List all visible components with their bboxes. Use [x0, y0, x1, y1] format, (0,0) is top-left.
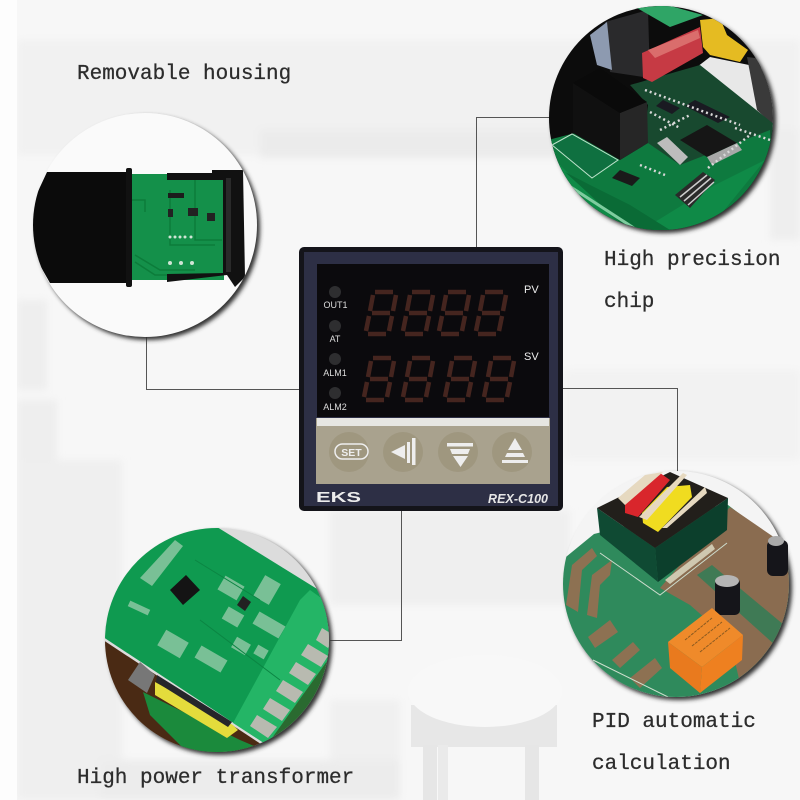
LED labels: OUT1	[323, 300, 348, 310]
button panel	[316, 418, 550, 484]
EKS logo: EKS	[316, 489, 361, 506]
black housing sleeve	[33, 172, 126, 283]
copper stripes	[566, 548, 612, 618]
red capacitor	[642, 27, 703, 82]
panel: high power transformer photo	[100, 520, 335, 755]
label: PID automatic calculation	[592, 711, 756, 776]
panel: PID automatic calculation photo	[562, 470, 796, 704]
right backdrop	[697, 57, 773, 130]
label: removable housing: Removable housing	[77, 63, 291, 86]
left arrow button	[391, 438, 416, 465]
LED labels: AT	[330, 334, 341, 344]
yellow transformer	[700, 18, 748, 62]
label: high precision chip: High precision	[604, 249, 780, 272]
crystal	[657, 137, 688, 165]
SV label: SV	[524, 351, 539, 363]
temperature controller device	[299, 247, 563, 511]
relay	[574, 98, 648, 160]
pin header	[675, 172, 715, 208]
small components	[640, 90, 770, 175]
ICs	[612, 100, 742, 186]
indicator LEDs	[329, 286, 341, 399]
copper area	[660, 507, 789, 678]
yellow transformer	[155, 682, 238, 738]
green circuit board	[563, 505, 789, 697]
display window	[317, 264, 549, 417]
label: PID automatic calculation: PID automatic	[592, 711, 756, 734]
LED labels: ALM1	[323, 368, 347, 378]
label: high precision chip: chip	[604, 291, 654, 314]
main green board	[100, 520, 335, 745]
PV label: PV	[524, 284, 539, 296]
LED labels	[323, 300, 348, 412]
buttons	[329, 432, 532, 472]
black front bezel	[167, 170, 245, 287]
label: high precision chip	[604, 249, 780, 314]
collar	[126, 168, 132, 287]
SET button: SET	[341, 447, 362, 459]
blue capacitor stripe	[590, 22, 612, 70]
light green edge strip	[233, 590, 335, 745]
model name: REX-C100	[488, 492, 548, 506]
bright green PCB	[551, 130, 770, 230]
ribbon cable	[128, 662, 155, 693]
component clusters	[128, 540, 285, 673]
green circuit board	[131, 174, 224, 280]
stool	[408, 655, 562, 800]
up arrow button	[502, 438, 528, 463]
LED labels: ALM2	[323, 402, 347, 412]
down arrow button	[447, 443, 473, 467]
orange relay	[668, 608, 743, 693]
dark capacitor	[605, 10, 650, 78]
main chip	[170, 575, 200, 605]
capacitor right	[767, 536, 788, 576]
pads	[250, 628, 335, 738]
capacitor centre	[715, 575, 740, 615]
panel: removable housing photo	[20, 113, 260, 340]
below-board area	[105, 641, 260, 752]
top green board	[637, 5, 703, 27]
connector lines	[146, 118, 678, 640]
dark PCB area	[630, 65, 773, 165]
seven segment digits	[364, 292, 514, 400]
panel: high precision chip photo	[545, 5, 776, 240]
SET button	[335, 444, 368, 459]
small chip	[237, 596, 251, 611]
transformer	[597, 472, 728, 584]
label: high power transformer: High power transformer	[77, 767, 354, 790]
label: PID automatic calculation: calculation	[592, 753, 731, 776]
